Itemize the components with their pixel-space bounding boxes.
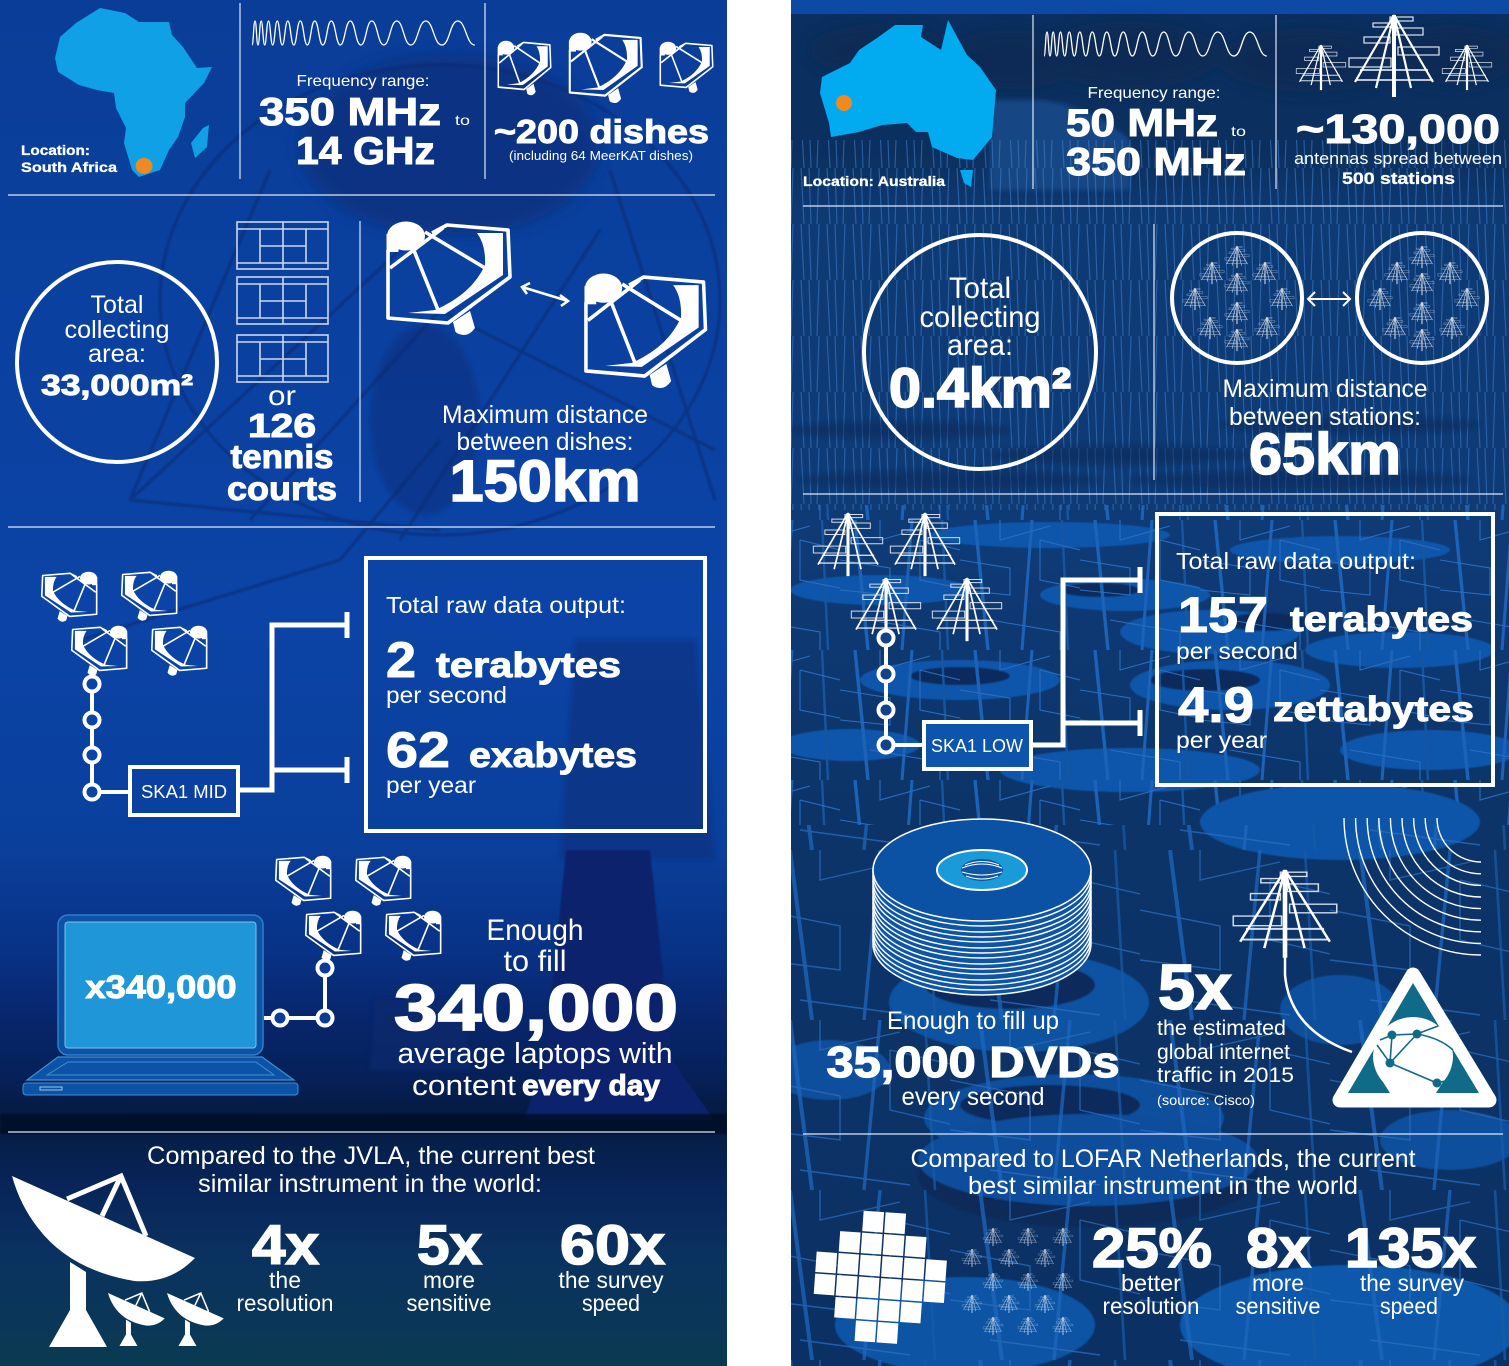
- icon: laptop: [23, 915, 298, 1095]
- stat: resolution: 4x: [252, 1213, 319, 1276]
- location label: [21, 142, 117, 175]
- tennis courts text: courts: [227, 470, 337, 507]
- stat: survey speed: the survey: [1360, 1270, 1464, 1296]
- frequency range text: [259, 73, 470, 173]
- DVD text: every second: [902, 1083, 1044, 1111]
- maximum distance text: 65km: [1249, 422, 1401, 487]
- stat: survey speed: 60x: [560, 1213, 665, 1276]
- data output box: Total raw data output:: [386, 592, 626, 618]
- maximum distance text: 150km: [450, 449, 640, 514]
- icon: four dishes linked to laptop: [264, 856, 441, 1026]
- comparison heading: similar instrument in the world:: [198, 1170, 542, 1198]
- collecting area circle: area:: [88, 340, 146, 368]
- frequency chirp wave: [1044, 32, 1267, 56]
- icon: stack of DVDs: [873, 819, 1091, 995]
- frequency chirp wave: [252, 21, 475, 45]
- icon: four dishes: [42, 571, 207, 676]
- frequency range text: 350 MHz: [259, 91, 441, 134]
- stat: survey speed: speed: [582, 1290, 640, 1316]
- icon: two antenna stations with distance arrow: [1172, 233, 1487, 363]
- laptops text: Enough: [486, 914, 584, 947]
- frequency range text: 14 GHz: [296, 130, 435, 173]
- antenna count: 500 stations: [1342, 169, 1455, 188]
- icon: core tile array: [811, 1208, 950, 1347]
- signal chain diagram: SKA1 LOW: SKA1 LOW: [931, 736, 1023, 756]
- data output box: 4.9: [1178, 677, 1254, 733]
- antenna count: [1294, 106, 1502, 188]
- maximum distance text: Maximum distance: [1222, 375, 1428, 403]
- icon: tennis courts: [237, 222, 328, 382]
- DVD text: 35,000 DVDs: [826, 1038, 1120, 1087]
- icon: three antennas: [1296, 15, 1492, 97]
- data output box: 2: [386, 632, 416, 688]
- frequency range text: Frequency range:: [296, 73, 430, 90]
- maximum distance text: between stations:: [1229, 403, 1421, 431]
- collecting area circle: [864, 235, 1096, 469]
- frequency range text: Frequency range:: [1088, 85, 1220, 102]
- frequency range text: [1066, 85, 1246, 184]
- comparison heading: best similar instrument in the world: [968, 1172, 1358, 1200]
- stat: resolution: better: [1121, 1270, 1181, 1296]
- laptops text: average laptops with: [398, 1038, 672, 1070]
- map: Australia with site marker: [820, 20, 996, 187]
- collecting area circle: area:: [947, 329, 1013, 362]
- collecting area circle: Total: [949, 272, 1011, 305]
- stat: sensitivity: 5x: [417, 1213, 482, 1276]
- stat: resolution: the: [269, 1267, 301, 1293]
- collecting area circle: 33,000m²: [41, 370, 193, 402]
- collecting area circle: [17, 262, 217, 462]
- collecting area circle: Total: [90, 291, 144, 319]
- laptops text: to fill: [504, 945, 566, 978]
- data output box: [1157, 514, 1493, 785]
- icon: antenna wired to internet globe: [1233, 870, 1489, 1100]
- icon: three dishes: [498, 33, 713, 103]
- internet traffic text: [1157, 951, 1294, 1108]
- icon: parabolic dishes: [12, 1176, 224, 1347]
- map: Africa with site marker: [55, 8, 212, 177]
- data output box: per second: [386, 682, 507, 708]
- data output box: per second: [1176, 638, 1298, 664]
- icon: laptop: x340,000: [86, 969, 236, 1005]
- background photo: dish at dusk: [0, 0, 727, 1366]
- panel: SKA1 MID South Africa: [0, 0, 727, 1366]
- collecting area circle: collecting: [64, 316, 170, 344]
- antenna count: antennas spread between: [1294, 149, 1502, 168]
- data output box: zettabytes: [1273, 690, 1474, 729]
- stat: sensitivity: more: [423, 1267, 475, 1293]
- data output box: 157: [1178, 587, 1268, 643]
- data output box: terabytes: [1290, 600, 1473, 639]
- frequency range text: to: [1231, 123, 1246, 139]
- internet traffic text: the estimated: [1157, 1017, 1286, 1040]
- antenna count: ~130,000: [1296, 106, 1500, 152]
- laptops text: every day: [522, 1070, 660, 1102]
- signal chain diagram: SKA1 MID: [84, 612, 347, 815]
- stat: sensitivity: [406, 1213, 492, 1316]
- frequency range text: 350 MHz: [1066, 141, 1246, 184]
- stat: resolution: [236, 1213, 334, 1316]
- icon: small antenna field: [962, 1228, 1073, 1335]
- stat: survey speed: the survey: [558, 1267, 664, 1293]
- data output box: Total raw data output:: [1176, 548, 1416, 574]
- collecting area circle: collecting: [920, 301, 1040, 334]
- internet traffic text: global internet: [1157, 1041, 1290, 1064]
- collecting area circle: 0.4km²: [889, 356, 1071, 419]
- data output box: per year: [386, 772, 476, 798]
- dish count: (including 64 MeerKAT dishes): [509, 148, 693, 163]
- DVD text: Enough to fill up: [887, 1007, 1059, 1035]
- tennis courts text: tennis: [230, 438, 334, 475]
- stat: survey speed: [558, 1213, 665, 1316]
- internet traffic text: traffic in 2015: [1157, 1064, 1294, 1087]
- signal chain diagram: SKA1 MID: SKA1 MID: [141, 782, 227, 802]
- DVD text: [826, 1007, 1120, 1111]
- maximum distance text: [442, 401, 648, 514]
- stat: resolution: [1092, 1216, 1212, 1319]
- stat: resolution: resolution: [236, 1290, 334, 1316]
- laptops text: 340,000: [394, 971, 678, 1044]
- stat: survey speed: 135x: [1345, 1216, 1476, 1279]
- comparison heading: [910, 1145, 1416, 1200]
- stat: sensitivity: 8x: [1246, 1216, 1311, 1279]
- location label: Location:: [21, 142, 90, 158]
- frequency range text: to: [455, 112, 470, 128]
- stat: resolution: resolution: [1102, 1293, 1200, 1319]
- location label: Location: Australia: [803, 173, 945, 189]
- frequency range text: 50 MHz: [1066, 102, 1218, 145]
- stat: survey speed: [1345, 1216, 1476, 1319]
- laptops text: content: [412, 1070, 516, 1102]
- icon: four antennas: [813, 513, 1002, 641]
- stat: sensitivity: sensitive: [406, 1290, 492, 1316]
- comparison heading: Compared to the JVLA, the current best: [147, 1142, 595, 1170]
- panel: SKA1 LOW Australia: [770, 0, 1509, 1366]
- stat: resolution: 25%: [1092, 1216, 1212, 1279]
- stat: sensitivity: sensitive: [1236, 1293, 1320, 1319]
- dish count: ~200 dishes: [494, 113, 709, 150]
- maximum distance text: Maximum distance: [442, 401, 648, 429]
- comparison heading: [147, 1142, 595, 1198]
- stat: sensitivity: more: [1252, 1270, 1304, 1296]
- laptops text: [394, 914, 678, 1102]
- signal chain diagram: SKA1 LOW: [878, 567, 1140, 769]
- background photo: antenna field: [770, 0, 1509, 1366]
- internet traffic text: 5x: [1158, 951, 1232, 1023]
- stat: sensitivity: [1236, 1216, 1320, 1319]
- dish count: [494, 113, 709, 163]
- tennis courts text: 126: [248, 407, 316, 444]
- internet traffic text: (source: Cisco): [1157, 1092, 1255, 1108]
- stat: survey speed: speed: [1380, 1293, 1438, 1319]
- data output box: per year: [1176, 727, 1267, 753]
- data output box: 62: [386, 722, 450, 778]
- comparison heading: Compared to LOFAR Netherlands, the current: [910, 1145, 1416, 1173]
- tennis courts text: [227, 380, 337, 507]
- maximum distance text: between dishes:: [456, 428, 634, 456]
- data output box: [366, 558, 705, 831]
- tennis courts text: or: [268, 380, 296, 411]
- maximum distance text: [1222, 375, 1428, 487]
- icon: two dishes with distance arrow: [386, 222, 706, 388]
- icon: signal arcs: [1344, 818, 1481, 955]
- data output box: terabytes: [436, 646, 621, 685]
- location label: South Africa: [21, 159, 117, 175]
- data output box: exabytes: [469, 736, 637, 775]
